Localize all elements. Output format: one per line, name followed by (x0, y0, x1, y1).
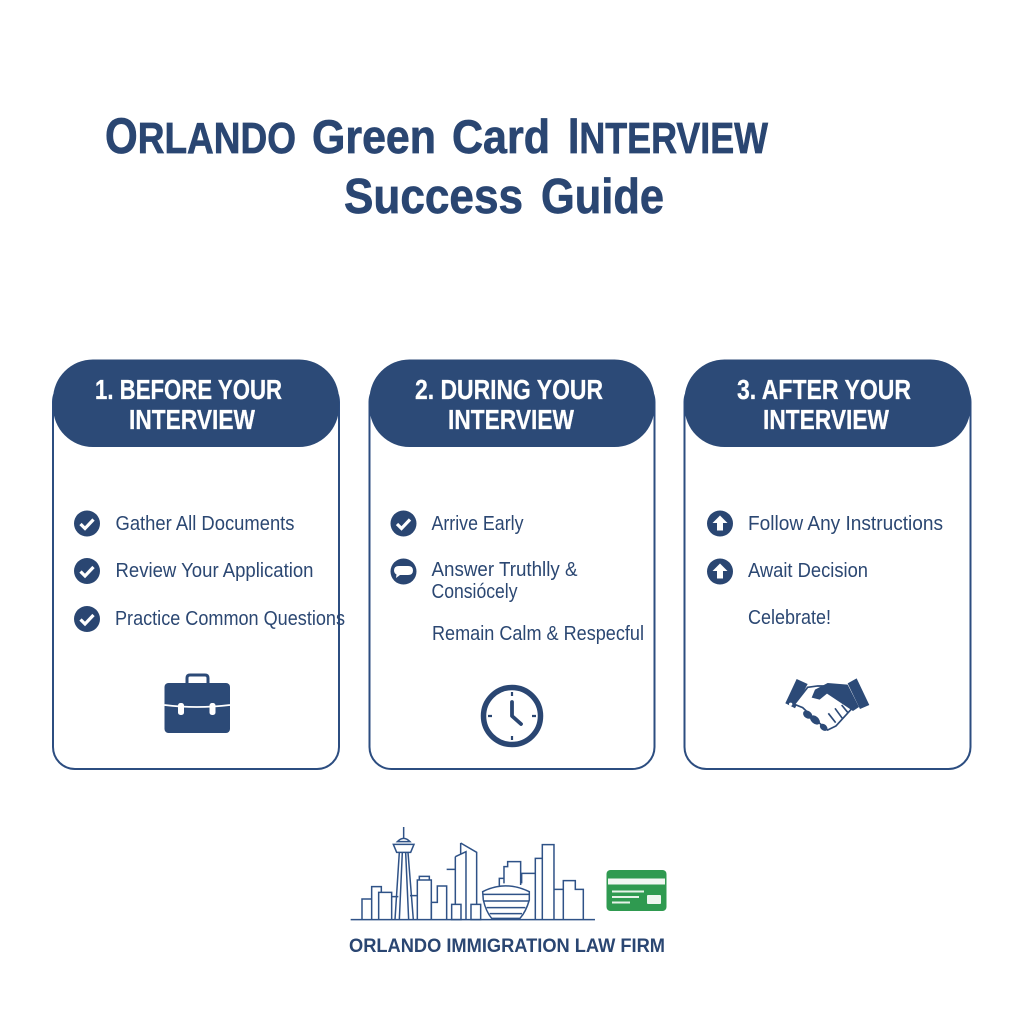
item: celebrate: Celebrate! (748, 607, 831, 629)
title: ORLANDO (105, 108, 296, 164)
item: review your application (74, 558, 314, 584)
item: await decision (707, 558, 868, 584)
heading: after: INTERVIEW (763, 404, 889, 435)
title (105, 108, 768, 224)
item: follow any instructions (707, 510, 943, 536)
item: answer truthfully: Consiócely (432, 581, 518, 603)
title: Green (312, 110, 436, 163)
item: review your application: Review Your Application (116, 560, 314, 582)
item: gather all documents (74, 510, 294, 536)
heading: during: 2. DURING YOUR (415, 374, 603, 405)
heading: after (684, 360, 970, 447)
icon: orlando skyline (351, 827, 595, 920)
heading: before: 1. BEFORE YOUR (95, 374, 282, 405)
icon: handshake (785, 678, 869, 732)
panel: during your interview (370, 360, 654, 769)
panel: before your interview (53, 360, 345, 769)
item: follow any instructions: Follow Any Instructions (748, 513, 943, 535)
item: gather all documents: Gather All Documents (116, 513, 294, 535)
footer: firm name: ORLANDO IMMIGRATION LAW FIRM (349, 935, 665, 957)
icon: green card (606, 870, 666, 911)
heading: during (370, 360, 654, 447)
heading: after: 3. AFTER YOUR (737, 374, 911, 405)
item: answer truthfully (390, 558, 578, 603)
item: remain calm: Remain Calm & Respecful (432, 623, 644, 645)
item: practice common questions: Practice Common Questions (115, 608, 345, 630)
title: Guide (541, 170, 664, 224)
item: await decision: Await Decision (748, 560, 868, 582)
item: answer truthfully: Answer Truthlly & (432, 559, 578, 581)
title: INTERVIEW (568, 108, 768, 164)
icon: clock (484, 688, 540, 744)
title: Success (344, 170, 523, 224)
item: practice common questions (74, 606, 345, 632)
title: Card (452, 110, 550, 163)
heading: before: INTERVIEW (129, 404, 255, 435)
item: arrive early: Arrive Early (432, 513, 524, 535)
icon: briefcase (164, 675, 230, 733)
item: arrive early (390, 510, 524, 536)
panel: after your interview (684, 360, 970, 769)
heading: before (53, 360, 339, 447)
heading: during: INTERVIEW (448, 404, 574, 435)
